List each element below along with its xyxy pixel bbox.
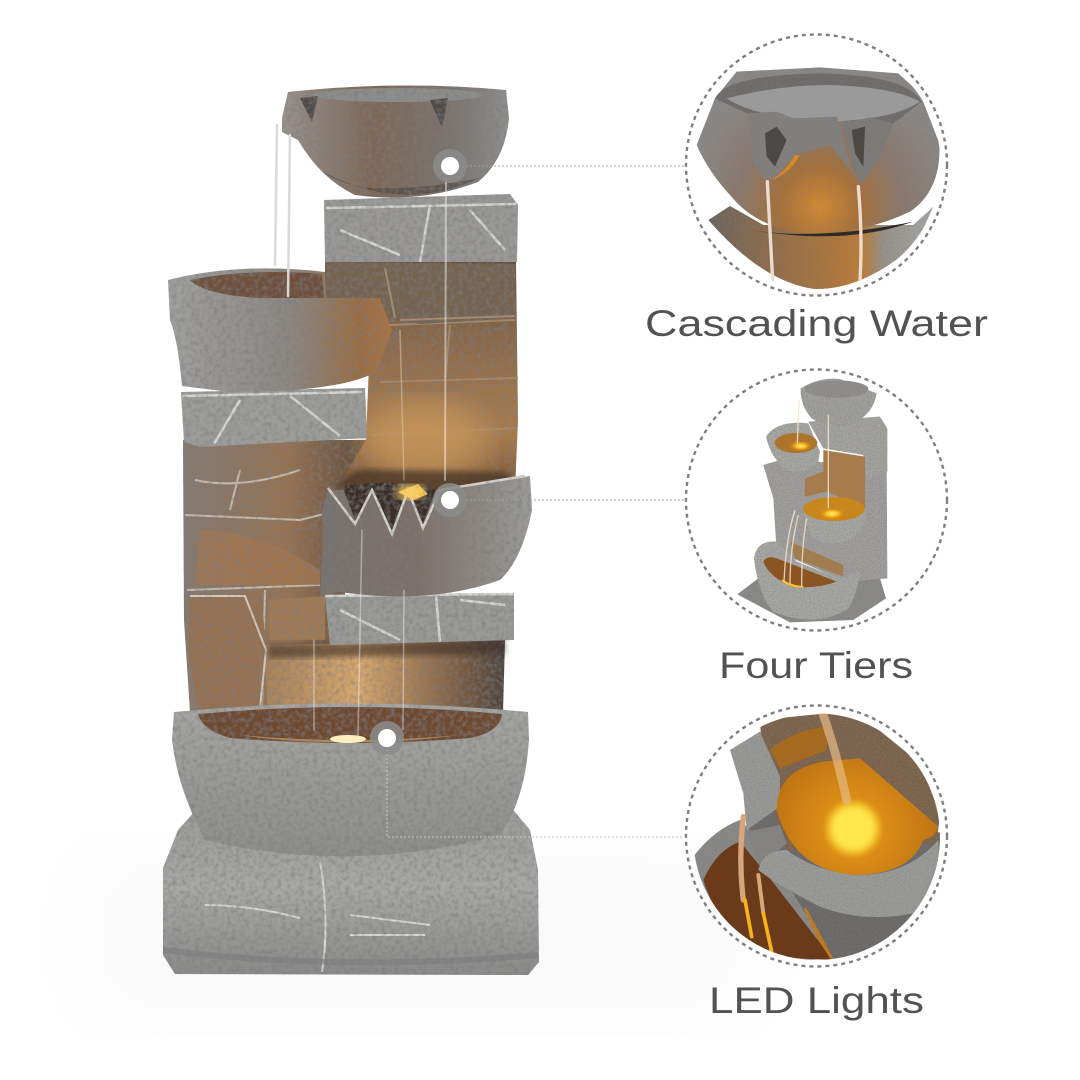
rear stone wall left <box>183 440 375 712</box>
first slab under second tier <box>181 388 367 447</box>
bottom tier bowl <box>172 704 529 856</box>
callout line: LED lights <box>387 750 684 837</box>
label: cascading water: Cascading Water <box>645 303 988 344</box>
label: LED lights: LED Lights <box>709 980 924 1021</box>
panel: LED lights <box>686 706 947 966</box>
marker dot: LED lights <box>370 721 404 755</box>
dotted ring <box>686 34 947 296</box>
rear stone wall right <box>325 262 518 490</box>
fountain product photo <box>163 85 539 975</box>
panel: four tiers <box>686 370 947 630</box>
top slab <box>324 194 518 262</box>
dotted ring <box>686 706 947 966</box>
floor shadow <box>90 850 750 1020</box>
lower tier light glow <box>396 485 424 499</box>
base block <box>163 800 539 975</box>
marker dot: cascading water <box>433 149 467 183</box>
third tier bowl <box>320 476 532 596</box>
label: four tiers: Four Tiers <box>719 645 913 686</box>
second tier bowl <box>168 268 392 392</box>
third tier slab <box>325 594 514 645</box>
lit niche glow <box>363 400 487 480</box>
lower lit alcove <box>188 592 505 712</box>
water streams <box>275 125 446 735</box>
infographic canvas <box>162 33 988 1020</box>
top tier bowl <box>282 85 509 198</box>
close-up: top bowl with spouts <box>697 67 939 289</box>
callout line: cascading water <box>462 165 684 167</box>
bottom pool glow <box>330 735 366 743</box>
callout line: four tiers <box>462 499 684 501</box>
dotted ring <box>686 370 947 630</box>
close-up: whole fountain angled view <box>737 379 887 622</box>
panel: cascading water <box>686 34 947 296</box>
close-up: illuminated pool <box>693 713 943 963</box>
alcove shadow <box>268 640 505 658</box>
marker dot: four tiers <box>433 483 467 517</box>
niche shadow <box>336 469 516 492</box>
upper wall band <box>325 262 516 324</box>
